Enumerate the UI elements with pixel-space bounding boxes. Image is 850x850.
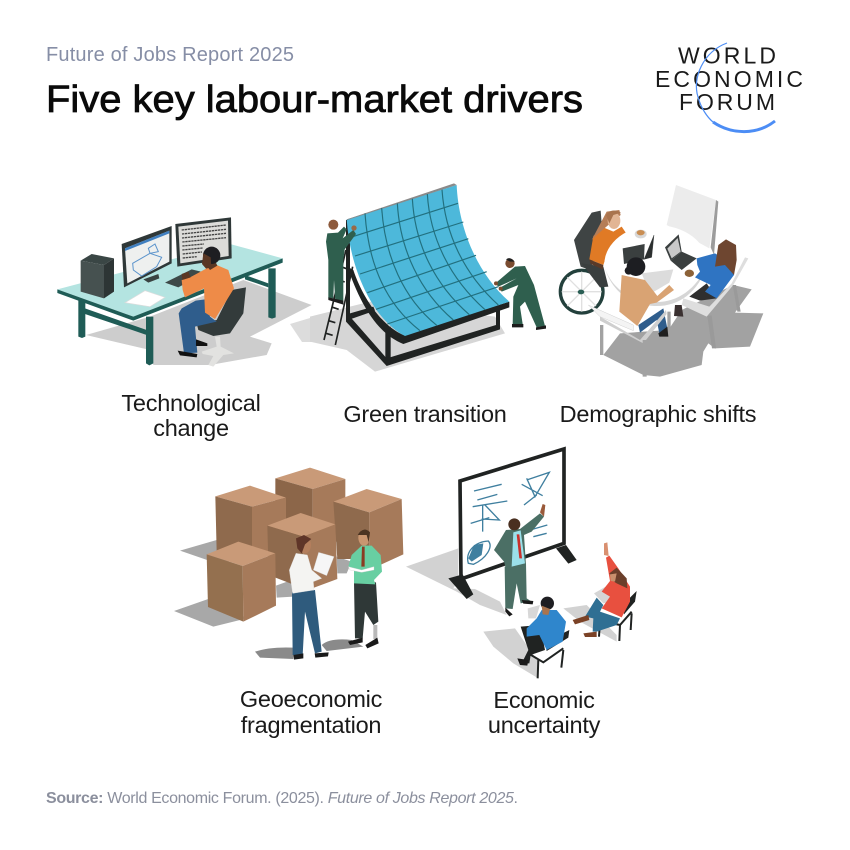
title: Five key labour-market drivers: [46, 79, 583, 121]
person in tan: [642, 269, 673, 294]
label: technological change: Technological: [121, 390, 261, 416]
source note: Source: World Economic Forum. (2025). Future of Jobs Report 2025.: [46, 790, 518, 807]
back box: [275, 468, 345, 489]
label: economic uncertainty: Economic: [493, 687, 595, 713]
people shadows: [255, 639, 363, 659]
box shadows: [174, 540, 352, 627]
ladder: [324, 250, 353, 345]
illustration: technological change: [57, 217, 312, 367]
chair shadow: [603, 285, 763, 377]
woman in blue: [689, 283, 717, 301]
worker pushing: [495, 266, 545, 327]
subtitle: Future of Jobs Report 2025: [46, 44, 294, 66]
right box: [333, 489, 402, 512]
whiteboard: [460, 449, 564, 579]
label: green transition: Green transition: [343, 401, 507, 427]
centre box: [267, 513, 335, 537]
illustration: green transition: [310, 183, 546, 372]
illustration: demographic shifts: [560, 185, 763, 377]
panel grid: [351, 190, 498, 331]
side chair right: [682, 257, 748, 317]
shadows: [406, 548, 507, 615]
right monitor: [175, 217, 232, 267]
seated man's chair: [528, 648, 563, 678]
woman: [292, 590, 322, 655]
left box: [215, 486, 286, 507]
logo: World Economic Forum: WORLD: [678, 42, 776, 68]
seated woman with raised hand: [594, 586, 612, 603]
logo: World Economic Forum: FORUM: [679, 89, 775, 115]
seated man: [521, 625, 545, 663]
solar panel: [347, 185, 509, 336]
laptops and cup: [623, 244, 645, 264]
wheelchair: [574, 211, 603, 270]
frame: [346, 220, 509, 366]
label: technological change: change: [153, 415, 229, 441]
paper shadow fragment: [290, 315, 320, 342]
label: geoeconomic fragmentation: Geoeconomic: [240, 686, 382, 712]
label: demographic shifts: Demographic shifts: [560, 401, 756, 427]
front box: [207, 542, 275, 566]
label: economic uncertainty: uncertainty: [488, 712, 601, 738]
empty chair: [667, 185, 716, 248]
label: geoeconomic fragmentation: fragmentation: [241, 712, 381, 738]
whiteboard formulas: [468, 472, 549, 564]
illustration: geoeconomic fragmentation: [174, 468, 403, 660]
worker on ladder: [326, 227, 356, 302]
desk top: [57, 244, 283, 317]
papers: [125, 291, 165, 307]
left monitor: [122, 226, 172, 287]
person: [179, 299, 217, 353]
seated woman's chair: [597, 612, 632, 641]
ground shadow: [310, 302, 505, 372]
logo: World Economic Forum: ECONOMIC: [655, 66, 803, 92]
logo: World Economic Forum: [655, 42, 803, 132]
presenter: [505, 563, 531, 609]
desk shadow: [86, 280, 312, 365]
desk legs: [78, 268, 276, 365]
illustration: economic uncertainty: [406, 449, 637, 678]
computer tower: [81, 254, 114, 265]
man: [354, 582, 378, 638]
round table: [604, 225, 708, 304]
woman in orange: [589, 227, 633, 265]
keyboard: [165, 269, 205, 287]
chair: [202, 337, 234, 367]
front chair: [600, 310, 667, 343]
